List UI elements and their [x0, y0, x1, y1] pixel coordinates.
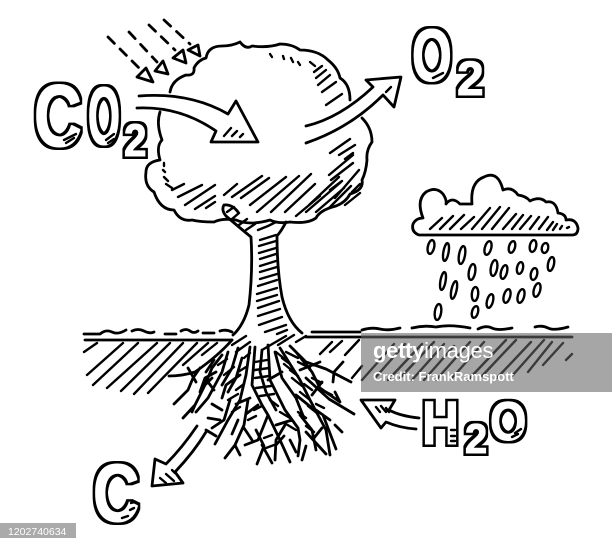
rain drops: [426, 239, 555, 320]
arrow: carbon dioxide into tree: [137, 95, 258, 142]
image id tag: [0, 523, 76, 538]
rain cloud: [413, 175, 578, 235]
ground line and soil shading: [84, 326, 572, 394]
arrow: carbon into soil: [152, 426, 206, 486]
oxygen label: O: [412, 15, 452, 97]
carbon dioxide label: 2: [124, 116, 147, 167]
arrow: water into roots: [361, 400, 419, 429]
oxygen label: [386, 15, 484, 106]
water label: O: [490, 390, 526, 452]
tree trunk: [223, 205, 302, 335]
cloud shading: [430, 207, 569, 230]
watermark band: [361, 333, 612, 392]
tree crown: [146, 42, 372, 223]
carbon dioxide label: [34, 68, 147, 167]
carbon label: C: [93, 446, 139, 539]
sunlight dashed arrows: [108, 20, 200, 82]
water label: H: [422, 389, 459, 457]
tree roots: [169, 335, 354, 464]
crown shading: [163, 139, 360, 216]
watermark credit: Credit: FrankRamspott: [373, 369, 515, 384]
carbon dioxide label: C: [34, 68, 82, 165]
image id tag: 1202740634: [8, 526, 67, 538]
arrow: oxygen out of tree: [306, 77, 401, 143]
oxygen label: 2: [457, 53, 484, 106]
carbon dioxide label: O: [88, 69, 120, 162]
watermark logo text: gettyimages: [373, 338, 493, 363]
water label: 2: [465, 415, 487, 462]
water label: [422, 389, 526, 462]
